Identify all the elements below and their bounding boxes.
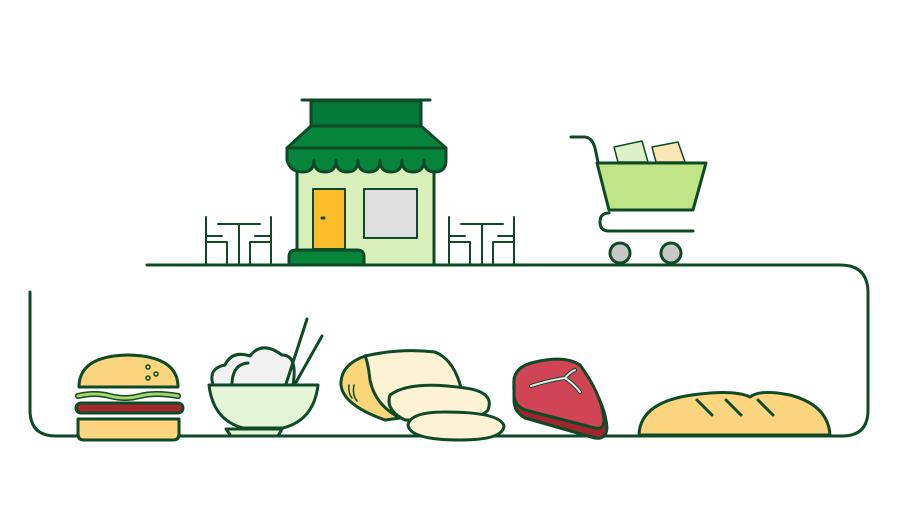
rice bowl bbox=[209, 319, 322, 436]
cheese loaf bbox=[341, 351, 504, 440]
shelf outline bbox=[30, 265, 868, 436]
steak bbox=[514, 359, 607, 438]
store bbox=[287, 100, 446, 265]
tables and chairs bbox=[206, 217, 514, 265]
step bbox=[289, 250, 364, 265]
door bbox=[313, 189, 345, 249]
burger bbox=[76, 355, 183, 440]
shopping cart bbox=[571, 137, 706, 263]
bread loaf bbox=[639, 392, 830, 435]
window bbox=[364, 189, 417, 238]
